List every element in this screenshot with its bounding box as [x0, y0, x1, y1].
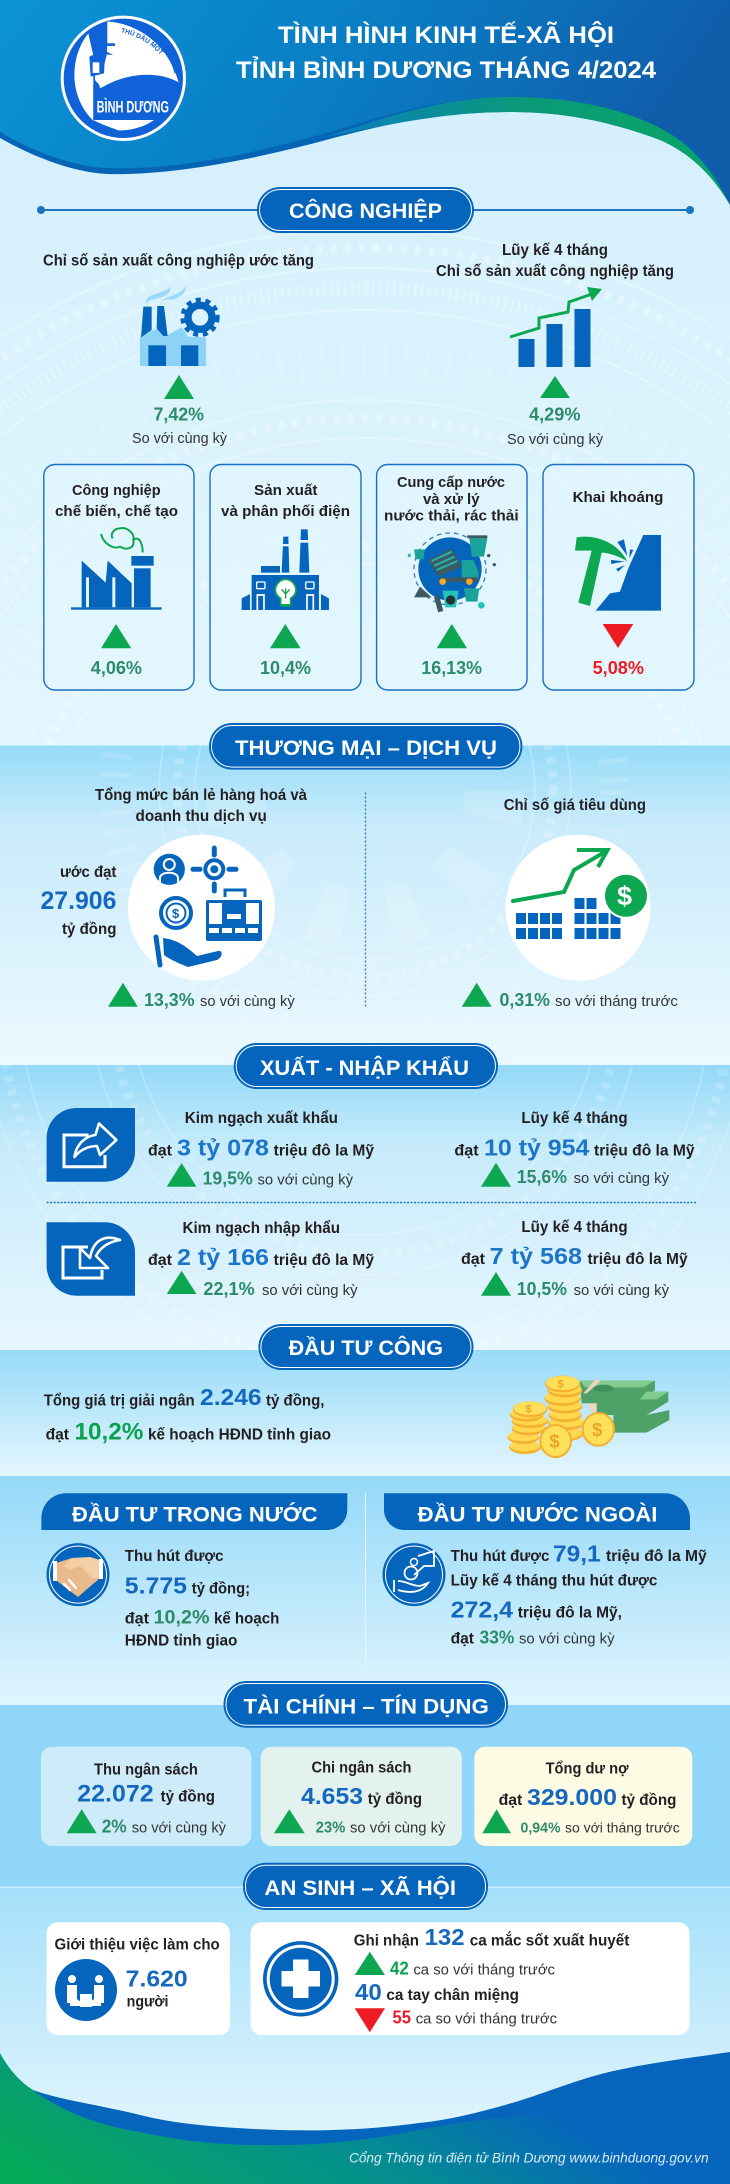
value text: 27.906	[40, 887, 116, 915]
tab: đầu tư nước ngoài: ĐẦU TƯ NƯỚC NGOÀI	[418, 1503, 657, 1527]
value text: tỷ đồng	[62, 921, 116, 938]
stat: lũy kế 4 tháng	[436, 242, 674, 448]
triangle up	[540, 376, 570, 398]
tab: đầu tư nước ngoài	[384, 1493, 690, 1530]
change text: so với tháng trước	[555, 993, 678, 1010]
card: sản xuất và phân phối điện	[210, 464, 361, 690]
stat: lũy kế 4 tháng: Lũy kế 4 tháng	[502, 242, 608, 259]
value: 4,06%	[91, 658, 142, 678]
triangle up	[481, 1272, 511, 1296]
domestic investment text: HĐND tỉnh giao	[125, 1633, 237, 1650]
triangle up	[481, 1163, 511, 1187]
foreign investment text: 33%	[480, 1627, 514, 1647]
change text: 13,3%	[144, 990, 195, 1010]
heading pill: công nghiệp: CÔNG NGHIỆP	[289, 199, 442, 223]
value: 10,4%	[260, 658, 311, 678]
icon circle: retail	[128, 835, 275, 981]
triangle up	[67, 1809, 97, 1833]
stat: lũy kế 4 tháng: Chỉ số sản xuất công nghiệp tăng	[436, 263, 674, 280]
card: giới thiệu việc làm: người	[127, 1994, 168, 2011]
heading pill: tài chính - tín dụng	[224, 1681, 508, 1728]
icon circle: price chart	[506, 835, 650, 981]
icon: coins and banknotes: $	[525, 1404, 532, 1416]
card: chi ngân sách: Chi ngân sách	[312, 1760, 412, 1777]
domestic investment text: tỷ đồng;	[192, 1580, 250, 1597]
foreign investment text: so với cùng kỳ	[519, 1630, 615, 1647]
triangle up	[164, 375, 194, 399]
public investment text	[44, 1384, 331, 1446]
card: thu ngân sách: Thu ngân sách	[94, 1762, 198, 1778]
triangle up	[167, 1163, 196, 1187]
import this month: triệu đô la Mỹ	[274, 1252, 374, 1269]
export cumulative: so với cùng kỳ	[574, 1170, 669, 1187]
card: giới thiệu việc làm: Giới thiệu việc làm cho	[54, 1936, 220, 1953]
foreign investment text: triệu đô la Mỹ,	[518, 1605, 622, 1622]
icon: hand receiving money	[382, 1543, 446, 1606]
card: tổng dư nợ	[474, 1747, 692, 1846]
header wave	[0, 0, 730, 205]
icon: coins and banknotes: $	[549, 1430, 560, 1451]
value 4,29%: 4,29%	[529, 404, 580, 424]
heading pill: đầu tư công	[258, 1324, 474, 1370]
triangle up	[462, 983, 492, 1007]
logo: Bình Dương emblem: THỦ DẦU MỘT	[122, 28, 164, 54]
import this month: so với cùng kỳ	[262, 1282, 358, 1299]
change text	[144, 990, 295, 1010]
card: công nghiệp chế biến, chế tạo: chế biến, chế tạo	[55, 503, 178, 520]
stat: chỉ số sản xuất công nghiệp: Chỉ số sản xuất công nghiệp ước tăng	[43, 252, 314, 270]
foreign investment text: triệu đô la Mỹ	[606, 1548, 707, 1565]
icon: handshake	[46, 1543, 110, 1606]
icon: rising bars with arrow	[510, 287, 602, 367]
card: y tế: ca mắc sốt xuất huyết	[470, 1932, 629, 1950]
export this month: triệu đô la Mỹ	[274, 1142, 374, 1160]
export cumulative: triệu đô la Mỹ	[594, 1142, 695, 1160]
import cumulative: đạt	[461, 1251, 485, 1268]
export this month: so với cùng kỳ	[258, 1171, 353, 1188]
card: thu ngân sách	[41, 1747, 251, 1846]
import this month: 22,1%	[203, 1279, 255, 1299]
heading pill: tài chính - tín dụng: TÀI CHÍNH – TÍN DỤNG	[244, 1695, 489, 1718]
card: cung cấp nước và xử lý nước thải, rác thải	[377, 464, 527, 690]
triangle up	[437, 624, 467, 648]
divider: commerce	[364, 792, 366, 1007]
import cumulative: 7 tỷ 568	[490, 1243, 582, 1269]
consumer price index block: Chỉ số giá tiêu dùng	[504, 797, 646, 814]
triangle up	[270, 624, 301, 648]
card: công nghiệp chế biến, chế tạo	[44, 464, 194, 690]
foreign investment text: Thu hút được	[451, 1548, 550, 1565]
domestic investment text: kế hoạch	[214, 1610, 279, 1627]
icon: factory	[71, 528, 162, 610]
triangle up	[355, 1952, 385, 1975]
export cumulative: 15,6%	[517, 1167, 567, 1187]
card: thu ngân sách: 2%	[102, 1817, 127, 1837]
domestic investment text: đạt	[125, 1610, 149, 1627]
card: cung cấp nước và xử lý nước thải, rác thải: nước thải, rác thải	[384, 508, 519, 524]
card: giới thiệu việc làm	[47, 1922, 230, 2035]
card: sản xuất và phân phối điện: và phân phối điện	[221, 503, 350, 520]
change text: so với cùng kỳ	[200, 993, 295, 1010]
heading pill: an sinh - xã hội: AN SINH – XÃ HỘI	[264, 1876, 456, 1900]
card: y tế: ca tay chân miệng	[386, 1987, 519, 2004]
value: 5,08%	[593, 658, 644, 678]
stat: chỉ số sản xuất công nghiệp	[43, 252, 314, 447]
export cumulative: đạt	[454, 1142, 479, 1160]
title: TỈNH BÌNH DƯƠNG THÁNG 4/2024	[236, 55, 656, 84]
triangle up	[108, 983, 138, 1007]
public investment text: 10,2%	[74, 1418, 143, 1446]
heading pill: xuất nhập khẩu	[234, 1043, 498, 1089]
triangle down	[355, 2008, 385, 2032]
import cumulative: triệu đô la Mỹ	[588, 1251, 688, 1268]
retail sales block: Tổng mức bán lẻ hàng hoá và	[95, 787, 307, 804]
icon: import	[47, 1222, 135, 1296]
tab: đầu tư trong nước: ĐẦU TƯ TRONG NƯỚC	[72, 1503, 318, 1527]
note: So với cùng kỳ	[507, 431, 603, 448]
triangle up	[167, 1271, 196, 1294]
foreign investment text: 272,4	[451, 1597, 513, 1623]
card: tổng dư nợ: Tổng dư nợ	[546, 1760, 629, 1777]
card: y tế: 40	[355, 1979, 382, 2005]
import cumulative: 10,5%	[517, 1279, 567, 1299]
public investment text: đạt	[46, 1426, 69, 1444]
card: tổng dư nợ: 0,94%	[520, 1820, 560, 1837]
card: thu ngân sách: tỷ đồng	[161, 1789, 215, 1806]
retail sales block: doanh thu dịch vụ	[136, 808, 267, 825]
card: y tế: 42	[390, 1958, 409, 1978]
footer wave	[0, 2052, 730, 2184]
change text	[500, 990, 678, 1010]
icon: garbage truck and bins	[408, 533, 496, 612]
card: khai khoáng: Khai khoáng	[573, 489, 663, 506]
card: công nghiệp chế biến, chế tạo: Công nghiệp	[72, 482, 161, 499]
triangle down	[603, 624, 633, 648]
title	[236, 21, 656, 84]
public investment text: Tổng giá trị giải ngân	[44, 1393, 195, 1410]
foreign investment text: 79,1	[553, 1540, 601, 1566]
icon: coins and banknotes: $	[557, 1378, 564, 1390]
icon: pickaxe and rock	[575, 535, 661, 611]
card: cung cấp nước và xử lý nước thải, rác thải: Cung cấp nước	[397, 474, 505, 491]
import cumulative: Lũy kế 4 tháng	[521, 1219, 628, 1236]
import this month: 2 tỷ 166	[177, 1244, 269, 1270]
card: thu ngân sách: 22.072	[77, 1781, 154, 1808]
import this month: Kim ngạch nhập khẩu	[182, 1220, 340, 1237]
icon circle: retail: $	[172, 906, 180, 921]
foreign investment text	[451, 1540, 707, 1647]
consumer price index block	[462, 797, 678, 1010]
value 7,42%: 7,42%	[154, 404, 204, 424]
card: sản xuất và phân phối điện: Sản xuất	[254, 482, 318, 499]
card: tổng dư nợ: 329.000	[527, 1784, 617, 1810]
note: So với cùng kỳ	[132, 430, 227, 447]
card: chi ngân sách: 4.653	[301, 1783, 363, 1809]
export this month: đạt	[148, 1142, 172, 1160]
card: y tế	[250, 1922, 690, 2035]
card: y tế: Ghi nhận	[354, 1933, 419, 1950]
heading pill: thương mại - dịch vụ	[209, 723, 522, 770]
icon: job interview	[55, 1959, 117, 2021]
triangle up	[101, 624, 131, 648]
logo: Bình Dương emblem: BÌNH DƯƠNG	[97, 97, 169, 116]
public investment text: tỷ đồng,	[266, 1393, 324, 1410]
export cumulative: Lũy kế 4 tháng	[521, 1110, 628, 1127]
export this month	[148, 1110, 374, 1188]
change text: 0,31%	[500, 990, 550, 1010]
import cumulative: so với cùng kỳ	[574, 1282, 669, 1299]
card: tổng dư nợ: đạt	[499, 1792, 522, 1809]
card: tổng dư nợ: so với tháng trước	[565, 1820, 680, 1836]
value text: ước đạt	[60, 864, 116, 881]
foreign investment text: đạt	[451, 1630, 474, 1647]
icon circle: price chart: $	[617, 881, 632, 911]
public investment text: kế hoạch HĐND tỉnh giao	[148, 1426, 331, 1444]
icon: export	[47, 1108, 135, 1182]
domestic investment text: Thu hút được	[125, 1548, 224, 1565]
icon: coins and banknotes: $	[592, 1419, 603, 1440]
export this month: 19,5%	[202, 1168, 253, 1188]
card: chi ngân sách: so với cùng kỳ	[350, 1820, 446, 1837]
import this month: đạt	[148, 1252, 172, 1269]
domestic investment text: 10,2%	[154, 1607, 210, 1628]
card: khai khoáng	[543, 464, 694, 690]
card: thu ngân sách: so với cùng kỳ	[132, 1820, 226, 1837]
card: chi ngân sách: 23%	[316, 1820, 345, 1837]
export this month: Kim ngạch xuất khẩu	[185, 1110, 338, 1127]
heading pill: xuất nhập khẩu: XUẤT - NHẬP KHẨU	[260, 1056, 469, 1080]
export this month: 3 tỷ 078	[177, 1134, 269, 1160]
logo: Bình Dương emblem	[60, 16, 186, 141]
value text	[40, 864, 116, 938]
card: y tế: 132	[425, 1924, 465, 1950]
card: y tế: ca so với tháng trước	[416, 2010, 557, 2027]
card: cung cấp nước và xử lý nước thải, rác thải: và xử lý	[423, 491, 480, 508]
title: TÌNH HÌNH KINH TẾ-XÃ HỘI	[278, 21, 614, 49]
card: chi ngân sách	[261, 1747, 462, 1846]
heading pill: công nghiệp	[257, 187, 474, 233]
triangle up	[274, 1809, 305, 1833]
icon: power plant with bulb	[242, 529, 329, 610]
foreign investment text: Lũy kế 4 tháng thu hút được	[451, 1573, 658, 1590]
icon: medical cross	[263, 1941, 338, 2017]
import cumulative	[461, 1219, 688, 1299]
retail sales block	[40, 787, 307, 1010]
section line: công nghiệp	[37, 206, 694, 214]
value: 16,13%	[421, 658, 482, 678]
import this month	[148, 1220, 374, 1299]
card: giới thiệu việc làm: 7.620	[126, 1966, 188, 1992]
card: tổng dư nợ: tỷ đồng	[622, 1792, 676, 1809]
footer credit: Cổng Thông tin điện tử Bình Dương www.binhduong.gov.vn	[349, 2150, 709, 2166]
heading pill: an sinh - xã hội	[243, 1863, 488, 1910]
domestic investment text: 5.775	[125, 1572, 187, 1598]
card: y tế: 55	[392, 2007, 411, 2027]
heading pill: đầu tư công: ĐẦU TƯ CÔNG	[289, 1336, 443, 1360]
icon: factory with gear	[140, 286, 217, 366]
heading pill: thương mại - dịch vụ: THƯƠNG MẠI – DỊCH VỤ	[235, 737, 497, 760]
tab: đầu tư trong nước	[41, 1493, 347, 1530]
public investment text: 2.246	[200, 1384, 262, 1410]
export cumulative	[454, 1110, 695, 1187]
card: chi ngân sách: tỷ đồng	[368, 1791, 422, 1808]
domestic investment text	[125, 1548, 279, 1650]
card: y tế: ca so với tháng trước	[413, 1961, 555, 1978]
icon: coins and banknotes	[507, 1376, 669, 1458]
export cumulative: 10 tỷ 954	[484, 1134, 590, 1160]
triangle up	[482, 1809, 511, 1833]
